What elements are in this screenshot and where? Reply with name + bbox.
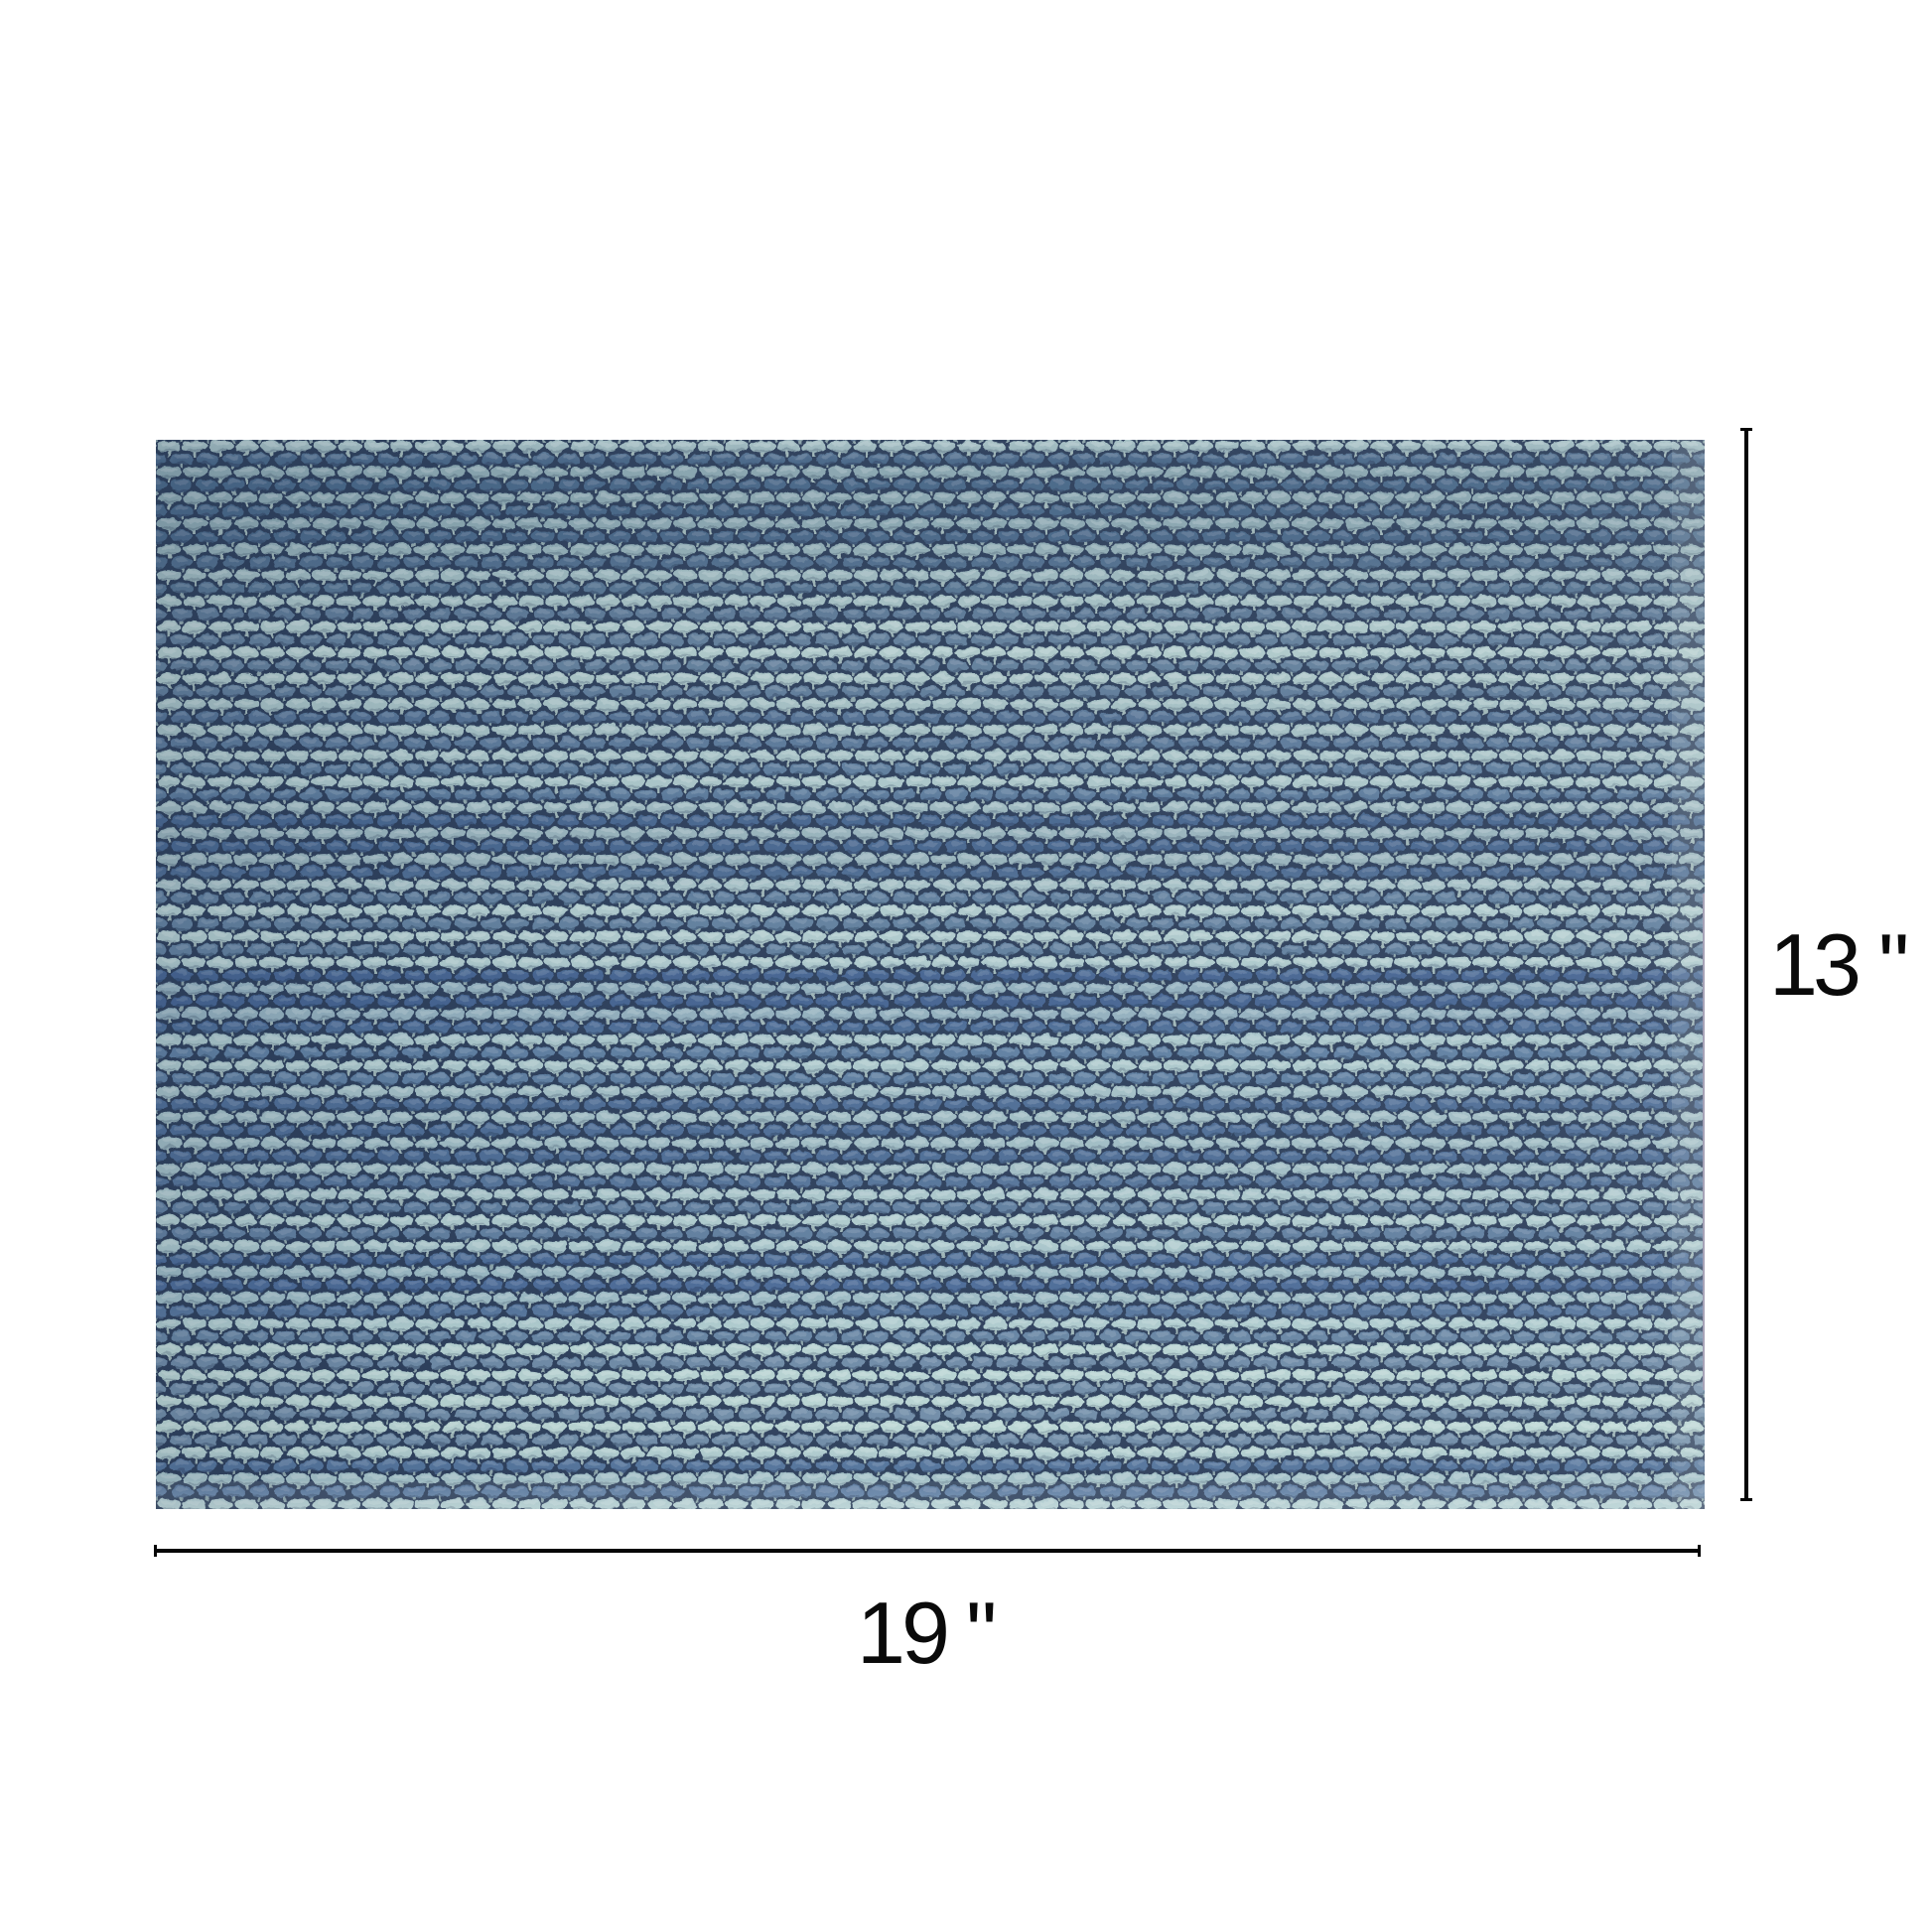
top cap xyxy=(1740,428,1752,431)
woven stitches xyxy=(139,427,1727,1519)
bottom cap xyxy=(1740,1498,1752,1501)
light stitch rows xyxy=(139,427,1727,1519)
blue stitch rows xyxy=(139,427,1727,1519)
right edge shadow xyxy=(1703,894,1705,1390)
warp threads xyxy=(139,427,1727,1519)
woven rug placemat xyxy=(139,427,1727,1519)
width dimension line xyxy=(154,1545,1701,1557)
right hem xyxy=(1672,440,1705,1509)
height dimension line xyxy=(1740,428,1752,1501)
stitch shading xyxy=(139,427,1727,1519)
height label: 13" xyxy=(1769,915,1909,1014)
width label: 19" xyxy=(857,1584,997,1682)
right cap xyxy=(1698,1545,1701,1557)
vertical rule xyxy=(1744,429,1748,1499)
bottom hem xyxy=(156,1481,1705,1509)
weave dark ground xyxy=(139,427,1727,1519)
side to side tone variation xyxy=(156,440,1705,1509)
horizontal rule xyxy=(155,1549,1699,1553)
left cap xyxy=(154,1545,157,1557)
